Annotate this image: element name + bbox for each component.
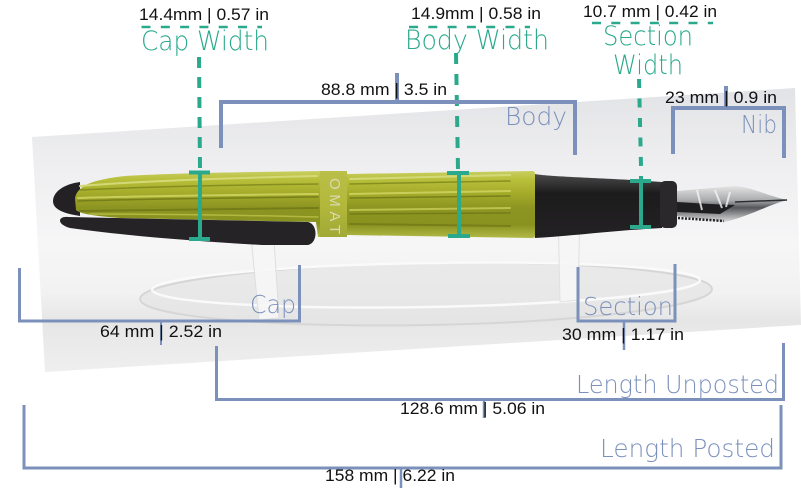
heading: cap width: Cap Width	[141, 26, 269, 57]
label: length unposted: Length Unposted	[576, 370, 779, 399]
bracket: length unposted	[216, 343, 784, 418]
acrylic pen stand	[140, 208, 712, 330]
pen	[53, 171, 788, 245]
measure: cap width	[139, 6, 269, 239]
grip section	[535, 174, 662, 238]
bracket: cap	[20, 265, 300, 345]
bracket: length posted	[24, 405, 781, 488]
nib feed	[677, 202, 735, 214]
heading: body width: Body Width	[405, 25, 549, 56]
cap band lettering: OMAT	[326, 178, 343, 234]
nib point slit	[735, 200, 787, 202]
feed teeth	[678, 218, 724, 221]
nib breather marks	[697, 190, 730, 210]
label: nib: Nib	[741, 110, 777, 139]
value: cap width: 14.4mm | 0.57 in	[139, 6, 269, 24]
cap grooves	[78, 176, 318, 217]
value: section width: 10.7 mm | 0.42 in	[583, 3, 717, 21]
cap barrel	[75, 171, 347, 237]
bracket: nib	[665, 86, 784, 158]
section ring	[660, 181, 677, 228]
pen clip	[60, 217, 316, 245]
label: body: Body	[505, 102, 567, 131]
value: length unposted: 128.6 mm | 5.06 in	[400, 400, 545, 418]
value: length posted: 158 mm | 6.22 in	[325, 467, 455, 485]
value: cap: 64 mm | 2.52 in	[100, 323, 222, 341]
label: length posted: Length Posted	[600, 434, 775, 463]
value: body width: 14.9mm | 0.58 in	[411, 5, 541, 23]
nib	[677, 186, 788, 222]
cap tip	[53, 182, 80, 216]
label: section: Section	[583, 292, 673, 321]
heading: section width: Section	[603, 21, 693, 52]
photo background	[32, 88, 801, 372]
bracket: body	[221, 73, 575, 155]
bracket: section	[562, 264, 684, 350]
measure: section width	[583, 3, 717, 227]
body barrel	[347, 171, 535, 238]
value: body: 88.8 mm | 3.5 in	[321, 81, 447, 99]
body grooves	[350, 175, 510, 226]
value: nib: 23 mm | 0.9 in	[665, 89, 777, 107]
heading: section width: Width	[613, 50, 683, 81]
label: cap: Cap	[250, 290, 296, 319]
measure: body width	[405, 5, 549, 236]
value: section: 30 mm | 1.17 in	[562, 326, 684, 344]
cap band	[320, 171, 347, 237]
